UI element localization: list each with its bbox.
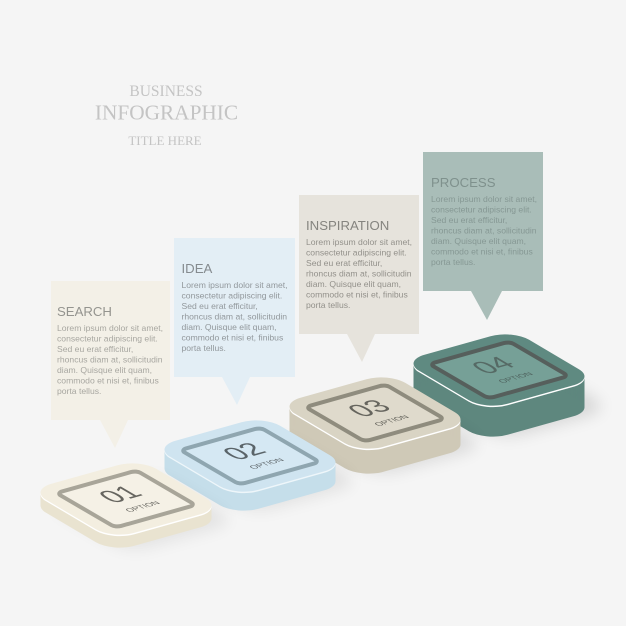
panel: process callout: rhoncus diam at, sollicitudin xyxy=(431,226,537,236)
tile 02 xyxy=(154,416,362,515)
panel: search callout: SEARCH xyxy=(57,304,112,319)
number 04: 04 xyxy=(464,353,523,378)
panel: search callout: porta tellus. xyxy=(57,386,101,396)
panel: search callout: diam. Quisque elit quam, xyxy=(57,365,152,375)
panel: inspiration callout: Sed eu erat efficitur, xyxy=(306,258,382,268)
panel: inspiration callout: rhoncus diam at, sollicitudin xyxy=(306,268,412,278)
panel: idea callout: diam. Quisque elit quam, xyxy=(182,322,277,332)
panel: inspiration callout: INSPIRATION xyxy=(306,218,389,233)
panel: idea callout: commodo et nisi et, finibus xyxy=(182,332,283,342)
number 01: 01 xyxy=(91,482,150,507)
panel: idea callout: consectetur adipiscing elit. xyxy=(182,290,282,300)
panel: process callout xyxy=(423,152,543,320)
panel: search callout: Sed eu erat efficitur, xyxy=(57,344,133,354)
panel: process callout: porta tellus. xyxy=(431,257,475,267)
panel: search callout: Lorem ipsum dolor sit amet, xyxy=(57,323,163,333)
panel: process callout: commodo et nisi et, finibus xyxy=(431,246,533,256)
panel: process callout: PROCESS xyxy=(431,175,496,190)
option label: OPTION xyxy=(246,457,286,470)
number 03: 03 xyxy=(340,396,399,421)
panel: search callout: commodo et nisi et, finibus xyxy=(57,376,159,386)
panel: search callout: rhoncus diam at, sollicitudin xyxy=(57,354,163,364)
panel: inspiration callout: Lorem ipsum dolor sit amet, xyxy=(306,237,412,247)
panel: inspiration callout xyxy=(299,195,419,362)
title: TITLE HERE xyxy=(128,133,202,148)
panel: idea callout: IDEA xyxy=(182,261,212,276)
panel: process callout: diam. Quisque elit quam, xyxy=(431,236,526,246)
panel: idea callout: Sed eu erat efficitur, xyxy=(182,301,258,311)
panel: inspiration callout: consectetur adipiscing elit. xyxy=(306,248,407,258)
panel: search callout: consectetur adipiscing elit. xyxy=(57,334,158,344)
option label: OPTION xyxy=(495,371,535,384)
panel: idea callout: porta tellus. xyxy=(182,343,226,353)
number 02: 02 xyxy=(215,439,274,464)
title xyxy=(95,83,238,148)
panel: process callout: consectetur adipiscing elit. xyxy=(431,204,532,214)
panel: idea callout: rhoncus diam at, sollicitudin xyxy=(182,312,287,322)
tile 03 xyxy=(278,373,488,478)
title: INFOGRAPHIC xyxy=(95,100,238,124)
panel: inspiration callout: diam. Quisque elit quam, xyxy=(306,279,401,289)
option label: OPTION xyxy=(371,414,411,427)
panel: idea callout: Lorem ipsum dolor sit amet, xyxy=(182,280,288,290)
panel: inspiration callout: porta tellus. xyxy=(306,300,350,310)
tile 04 xyxy=(402,330,612,441)
title: BUSINESS xyxy=(129,83,203,100)
panel: search callout xyxy=(51,281,170,448)
option label: OPTION xyxy=(122,500,162,513)
panel: process callout: Lorem ipsum dolor sit amet, xyxy=(431,194,537,204)
panel: process callout: Sed eu erat efficitur, xyxy=(431,215,507,225)
panel: idea callout xyxy=(174,238,295,405)
tile 01 xyxy=(30,459,238,553)
panel: inspiration callout: commodo et nisi et, finibus xyxy=(306,290,408,300)
